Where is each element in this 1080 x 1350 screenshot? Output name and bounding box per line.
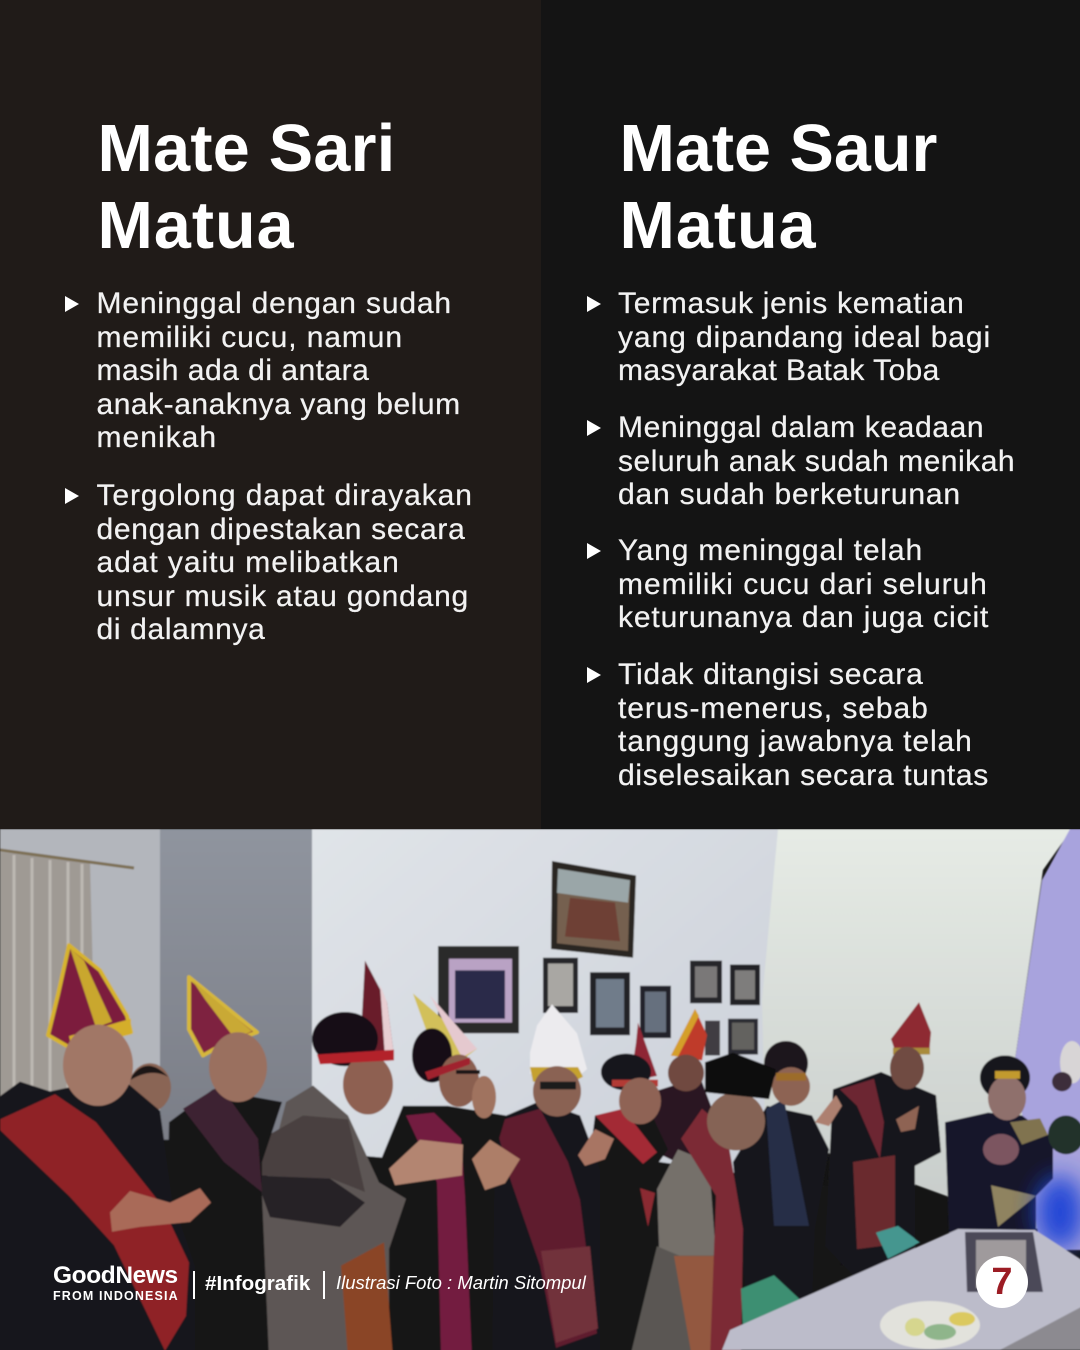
text: bullet 4: Tidak ditangisi secara	[618, 658, 924, 691]
person 7: man with red hat behind	[650, 1009, 720, 1169]
person 6: man with maroon hat	[565, 1023, 668, 1350]
footer: logo GoodNews from Indonesia	[53, 1262, 179, 1303]
person 9: man with red hat	[825, 1002, 941, 1275]
person behind: woman partially hidden	[128, 1063, 171, 1112]
bullet marker 2	[587, 420, 601, 436]
bullet marker 1	[587, 296, 601, 312]
text: bullet 2: Tergolong dapat dirayakan	[96, 479, 473, 512]
green chairs	[741, 1226, 920, 1328]
heading: Mate Sari Matua	[98, 112, 395, 262]
framed pictures	[438, 861, 760, 1056]
text: bullet 4	[618, 658, 989, 792]
bullet marker 2	[65, 488, 79, 504]
person 2: man with gold-trimmed hat	[165, 977, 282, 1350]
text: bullet 1: Meninggal dengan sudah	[96, 287, 452, 320]
flowers and glow on the right	[1036, 1041, 1080, 1249]
text: bullet 1: yang dipandang ideal bagi	[618, 321, 991, 354]
text: bullet 1: masyarakat Batak Toba	[618, 354, 940, 387]
text: bullet 3: Yang meninggal telah	[618, 534, 923, 567]
text: bullet 4: tanggung jawabnya telah	[618, 725, 973, 758]
text: bullet 3: memiliki cucu dari seluruh	[618, 568, 988, 601]
heading: Mate Saur Matua	[620, 112, 937, 262]
old man with black cap and scarf	[630, 1053, 776, 1350]
person 8: figure with blue scarf	[733, 1041, 842, 1304]
text: bullet 2	[96, 479, 473, 646]
text: bullet 2: unsur musik atau gondang	[96, 580, 469, 613]
person 5: man with white hat	[492, 1004, 614, 1350]
footer divider 2	[323, 1271, 325, 1299]
coffin with portrait	[722, 1229, 1080, 1350]
person 4: man with glasses and headband	[380, 994, 520, 1350]
footer: hashtag: #Infografik	[205, 1272, 310, 1295]
bullet marker 4	[587, 667, 601, 683]
text: bullet 1	[618, 287, 991, 387]
heading: Mate Saur Matua: Mate Saur	[620, 112, 937, 186]
text: bullet 1: masih ada di antara	[96, 354, 369, 387]
footer: logo GoodNews from Indonesia: FROM INDONESIA	[53, 1289, 179, 1303]
flowers on coffin	[880, 1301, 980, 1349]
text: bullet 1: anak-anaknya yang belum	[96, 388, 461, 421]
text: bullet 2: dengan dipestakan secara	[96, 513, 465, 546]
text: bullet 3	[618, 534, 989, 634]
footer: photo credit: Ilustrasi Foto : Martin Sitompul	[336, 1272, 586, 1293]
text: bullet 2: seluruh anak sudah menikah	[618, 445, 1015, 478]
text: bullet 4: diselesaikan secara tuntas	[618, 759, 989, 792]
page number badge: 7	[991, 1261, 1013, 1303]
person 3: man in gray shawl	[255, 961, 406, 1350]
room background	[0, 829, 1080, 1350]
bullet marker 1	[65, 296, 79, 312]
heading: Mate Saur Matua: Matua	[620, 188, 817, 262]
text: bullet 2: Meninggal dalam keadaan	[618, 411, 984, 444]
text: bullet 1	[96, 287, 461, 454]
bullet marker 3	[587, 543, 601, 559]
heading: Mate Sari Matua: Mate Sari	[98, 112, 395, 186]
text: bullet 2: dan sudah berketurunan	[618, 478, 961, 511]
panel: Mate Sari Matua	[0, 0, 541, 829]
text: bullet 1: memiliki cucu, namun	[96, 321, 403, 354]
panel: Mate Saur Matua	[541, 0, 1080, 829]
text: bullet 2: di dalamnya	[96, 613, 266, 646]
text: bullet 1: menikah	[96, 421, 217, 454]
photo illustration: Batak funeral ceremony	[0, 829, 1080, 1350]
text: bullet 1: Termasuk jenis kematian	[618, 287, 964, 320]
dark crowd mass	[0, 1140, 980, 1350]
text: bullet 2: adat yaitu melibatkan	[96, 546, 400, 579]
text: bullet 2	[618, 411, 1015, 511]
text: bullet 4: terus-menerus, sebab	[618, 692, 929, 725]
page number badge	[976, 1256, 1028, 1308]
heading: Mate Sari Matua: Matua	[98, 188, 295, 262]
person 1: man with red sash	[0, 945, 211, 1350]
footer: logo GoodNews from Indonesia: GoodNews	[53, 1262, 178, 1289]
text: bullet 3: keturunanya dan juga cicit	[618, 601, 989, 634]
person 10: woman at right	[945, 1056, 1053, 1261]
footer divider 1	[193, 1271, 195, 1299]
